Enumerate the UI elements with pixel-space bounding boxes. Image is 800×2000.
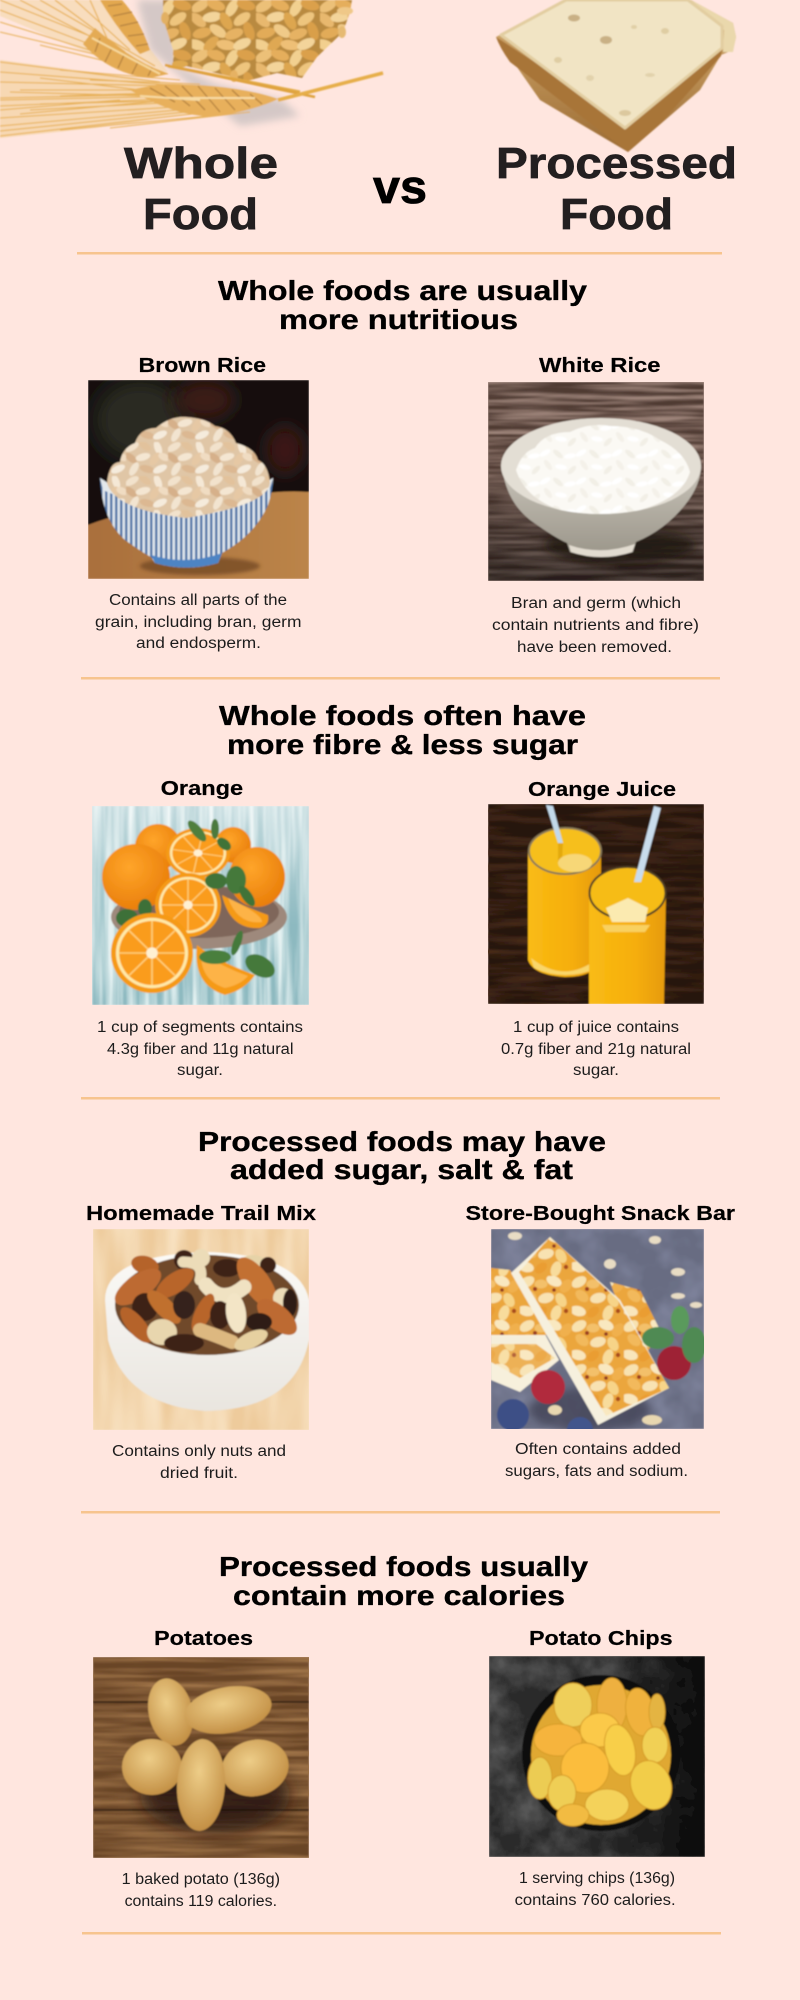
heading: more fibre & less sugar	[227, 729, 578, 760]
caption: potato chips: contains 760 calories.	[515, 1892, 676, 1909]
photo: trail mix in white bowl	[93, 1229, 309, 1430]
heading: Processed foods may have	[198, 1126, 606, 1157]
caption: snack bar: sugars, fats and sodium.	[505, 1463, 688, 1480]
title: Processed Food: Food	[560, 190, 673, 239]
label: Brown Rice: Brown Rice	[138, 354, 266, 377]
label: Store-Bought Snack Bar: Store-Bought Snack Bar	[466, 1202, 735, 1225]
caption: snack bar	[505, 1441, 688, 1480]
label: Potatoes: Potatoes	[154, 1627, 253, 1650]
heading: Whole foods often have	[219, 700, 586, 731]
photo: oranges on plate	[92, 806, 309, 1005]
label: Potato Chips: Potato Chips	[529, 1627, 673, 1650]
caption: orange juice: 0.7g fiber and 21g natural	[501, 1041, 691, 1058]
caption: trail mix: Contains only nuts and	[112, 1443, 286, 1460]
caption: white rice: contain nutrients and fibre)	[492, 617, 699, 634]
heading: contain more calories	[233, 1580, 565, 1611]
caption: orange juice: 1 cup of juice contains	[513, 1019, 679, 1036]
heading: more nutritious	[279, 304, 518, 335]
caption: potato chips: 1 serving chips (136g)	[519, 1870, 675, 1887]
title: Processed Food	[496, 139, 737, 239]
caption: potatoes: 1 baked potato (136g)	[122, 1871, 280, 1888]
heading	[219, 1551, 589, 1611]
caption: trail mix	[112, 1443, 286, 1482]
caption: orange juice: sugar.	[573, 1062, 619, 1079]
heading: Whole foods are usually	[218, 275, 588, 306]
title: Whole Food	[124, 139, 278, 239]
caption: orange: 1 cup of segments contains	[97, 1019, 303, 1036]
image: barley ears and grains	[0, 0, 383, 138]
photo: potatoes on wood	[93, 1657, 309, 1858]
caption: orange: sugar.	[177, 1062, 223, 1079]
photo: white rice in grey bowl	[488, 382, 704, 581]
photo: brown rice in blue bowl	[88, 380, 309, 579]
caption: orange: 4.3g fiber and 11g natural	[107, 1041, 294, 1058]
heading	[219, 700, 586, 760]
caption: brown rice	[95, 592, 302, 652]
label: White Rice: White Rice	[539, 354, 660, 377]
photo: granola snack bars	[491, 1229, 706, 1443]
label: Orange: Orange	[161, 777, 243, 800]
caption: orange juice	[501, 1019, 691, 1079]
caption: white rice: Bran and germ (which	[511, 595, 681, 612]
hero header	[0, 0, 737, 239]
caption: white rice	[492, 595, 699, 656]
panel: added sugar, salt and fat	[86, 1126, 735, 1482]
caption: potatoes: contains 119 calories.	[125, 1893, 277, 1910]
caption: potatoes	[122, 1871, 280, 1910]
caption: potato chips	[515, 1870, 676, 1909]
photo: potato chips in black bowl	[489, 1656, 705, 1857]
caption: brown rice: grain, including bran, germ	[95, 614, 302, 631]
title: Processed Food: Processed	[496, 139, 737, 188]
heading: Processed foods usually	[219, 1551, 589, 1582]
panel: more calories	[93, 1551, 705, 1910]
photo: two glasses of orange juice	[488, 804, 704, 1004]
title: vs: vs	[373, 160, 427, 213]
label: Orange Juice: Orange Juice	[528, 778, 676, 801]
caption: orange	[97, 1019, 303, 1079]
caption: trail mix: dried fruit.	[160, 1465, 238, 1482]
caption: brown rice: and endosperm.	[136, 635, 261, 652]
title: Whole Food: Whole	[124, 139, 278, 188]
heading	[218, 275, 588, 335]
panel: fibre and sugar	[92, 700, 704, 1079]
caption: snack bar: Often contains added	[515, 1441, 681, 1458]
image: bread slice	[496, 0, 736, 152]
heading: added sugar, salt & fat	[230, 1154, 573, 1185]
caption: brown rice: Contains all parts of the	[109, 592, 287, 609]
heading	[198, 1126, 606, 1185]
label: Homemade Trail Mix: Homemade Trail Mix	[86, 1202, 317, 1225]
caption: white rice: have been removed.	[517, 639, 672, 656]
title: Whole Food: Food	[143, 190, 258, 239]
panel: whole foods are more nutritious	[88, 275, 704, 656]
